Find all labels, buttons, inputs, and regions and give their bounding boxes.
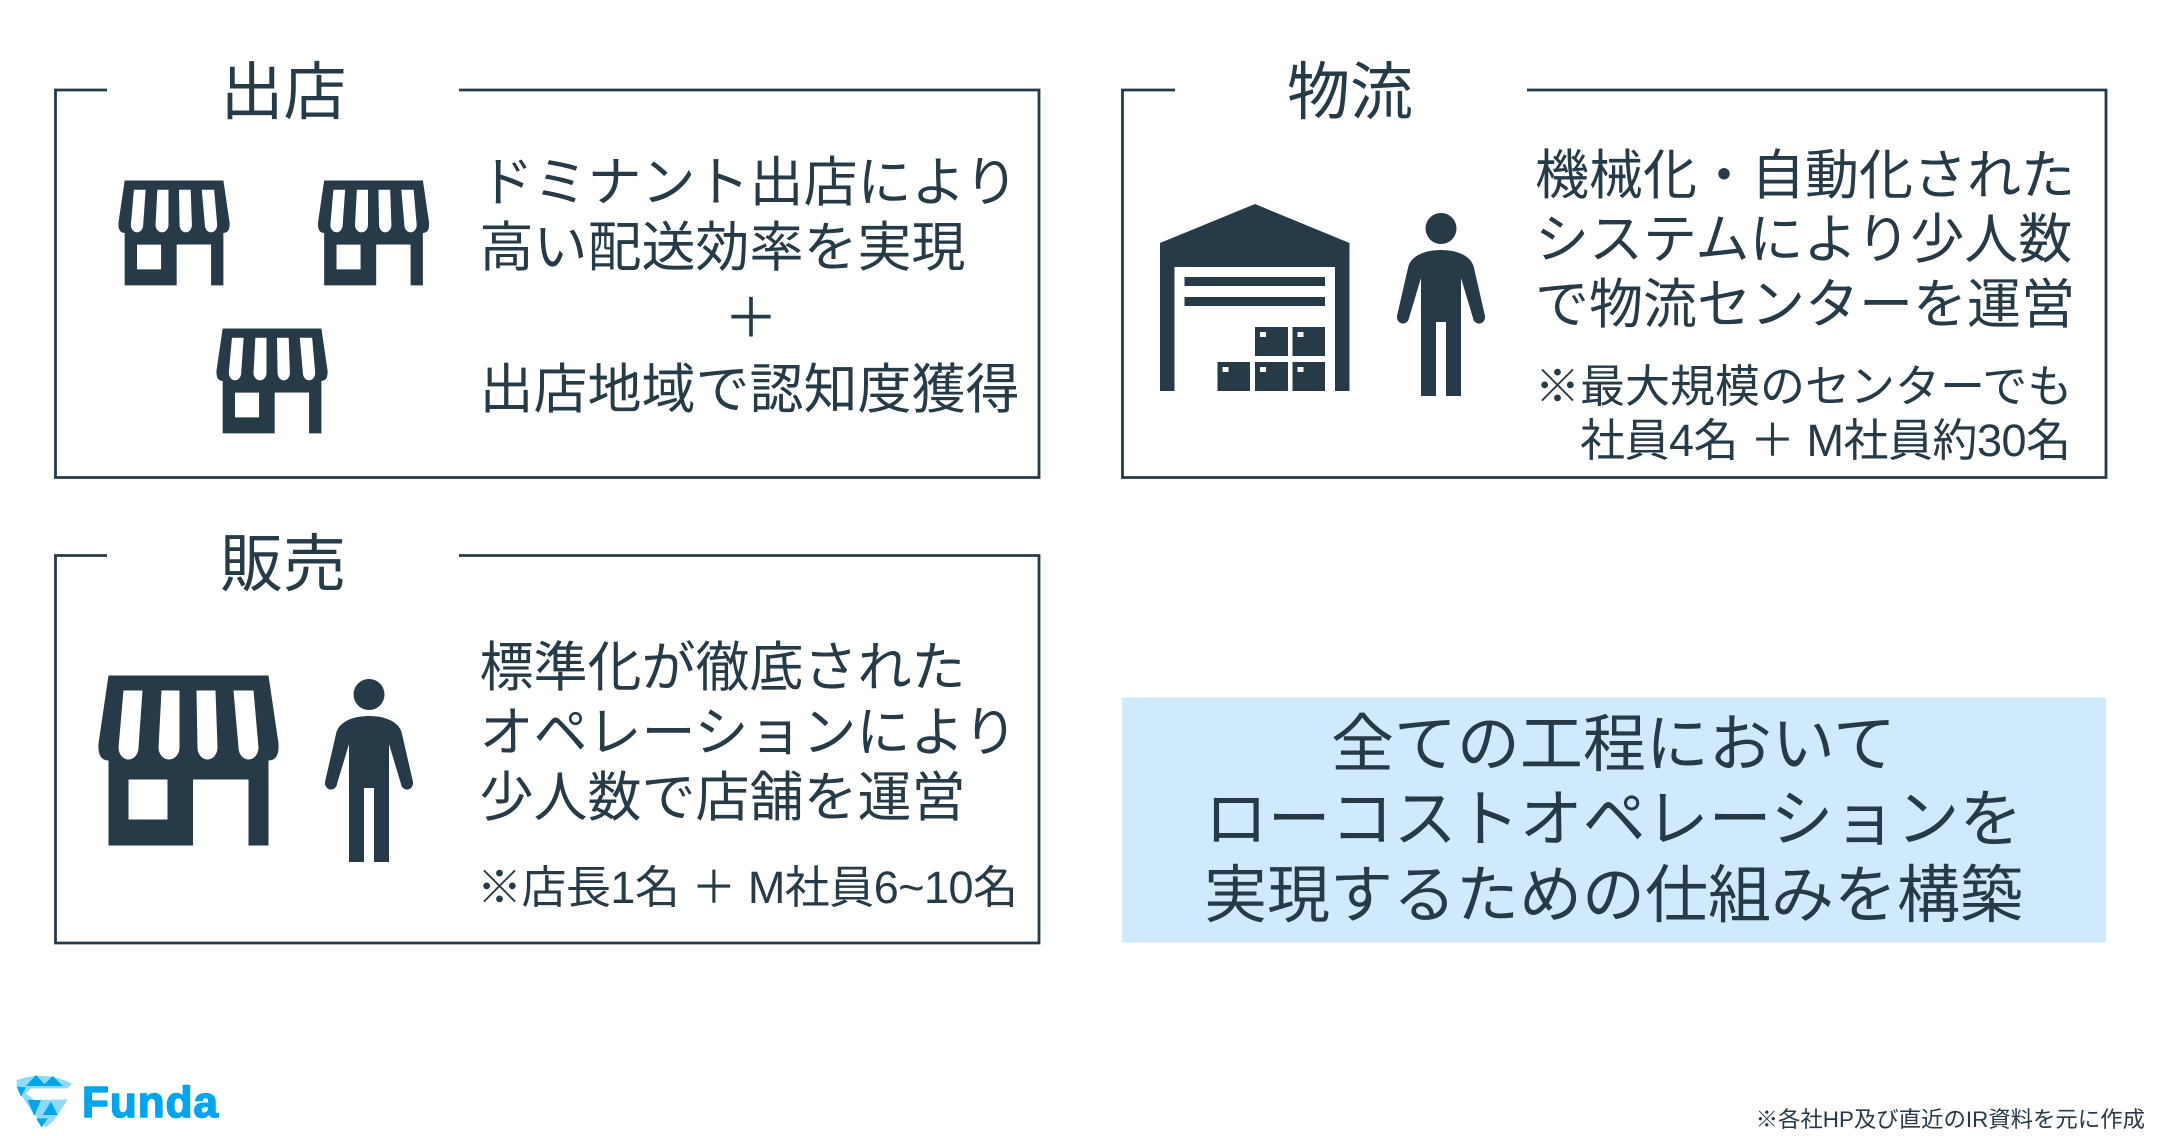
icon: store 3	[216, 328, 328, 433]
text: Funda wordmark: Funda	[82, 1078, 219, 1127]
icon: store 1	[118, 180, 230, 285]
panel: 出店	[56, 58, 1039, 478]
text: 物流 description	[1535, 146, 2075, 335]
icon: person	[325, 679, 413, 862]
note: 物流 staffing: ※最大規模のセンターでも	[1535, 361, 2072, 412]
text: 出店 description: 出店地域で認知度獲得	[480, 360, 1020, 420]
source note: ※各社HP及び直近のIR資料を元に作成	[1756, 1107, 2145, 1132]
icon: gem mark	[17, 1075, 72, 1127]
icon: store	[98, 676, 279, 846]
note: 物流 staffing: 社員4名 ＋ M社員約30名	[1580, 415, 2071, 466]
heading: 出店: 出店	[220, 58, 346, 128]
heading: 物流: 物流	[1287, 58, 1413, 128]
text: 出店 description	[480, 153, 1020, 420]
icon: store 2	[318, 180, 429, 285]
text: 物流 description: で物流センターを運営	[1535, 275, 2075, 335]
text: 物流 description: システムにより少人数	[1535, 210, 2072, 270]
icon: person	[1397, 213, 1485, 396]
callout: conclusion: 実現するための仕組みを構築	[1204, 861, 2023, 931]
text: 出店 description: 高い配送効率を実現	[480, 218, 966, 278]
text: 販売 description: 少人数で店舗を運営	[480, 768, 966, 828]
callout: conclusion	[1122, 698, 2106, 942]
text: 販売 description: オペレーションにより	[480, 703, 1017, 763]
heading: 販売: 販売	[220, 530, 346, 600]
text: 物流 description: 機械化・自動化された	[1535, 146, 2075, 206]
icon: warehouse	[1160, 204, 1350, 391]
text: 販売 description	[480, 638, 1017, 828]
logo: Funda	[17, 1075, 219, 1127]
panel: 販売	[56, 530, 1039, 943]
panel: 物流	[1122, 58, 2106, 478]
text: 出店 description: ＋	[724, 289, 778, 349]
text: 販売 description: 標準化が徹底された	[480, 638, 966, 698]
note: 販売 staffing: ※店長1名 ＋ M社員6~10名	[477, 862, 1018, 913]
note: 物流 staffing	[1535, 361, 2072, 466]
callout: conclusion: 全ての工程において	[1331, 710, 1896, 780]
callout: conclusion: ローコストオペレーションを	[1205, 785, 2022, 855]
text: 出店 description: ドミナント出店により	[480, 153, 1018, 213]
